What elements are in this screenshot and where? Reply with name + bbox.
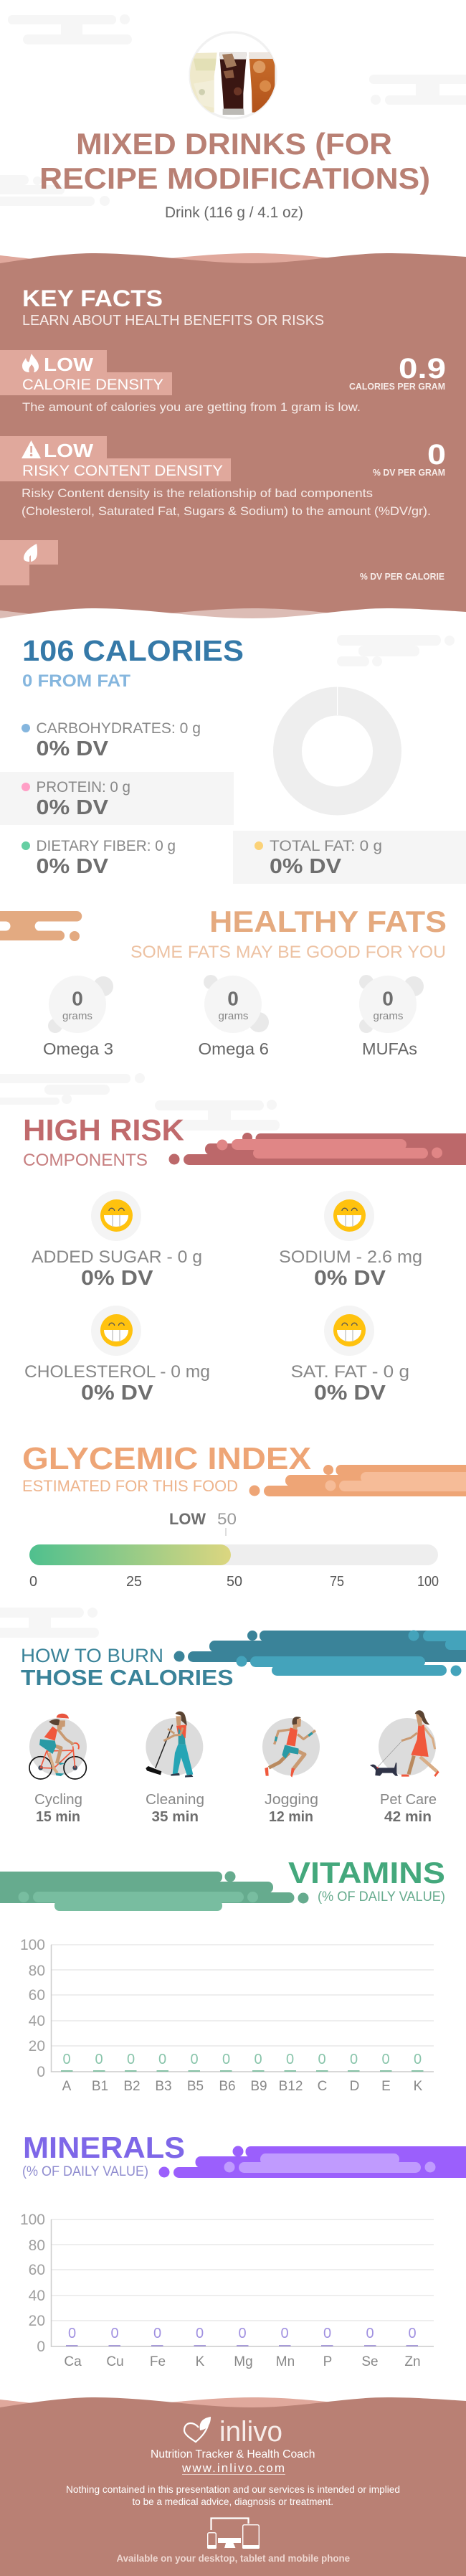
heading: glycemic index: GLYCEMIC INDEX bbox=[22, 1441, 311, 1476]
title bbox=[39, 127, 430, 195]
heading: how to burn those calories bbox=[21, 1645, 234, 1690]
legend: protein: PROTEIN: 0 g bbox=[36, 779, 130, 796]
glycemic index gauge: 25 bbox=[126, 1574, 142, 1590]
risky content density block bbox=[0, 436, 431, 518]
stat: percent DV per gram: % DV PER GRAM bbox=[373, 467, 445, 478]
calorie density block: The amount of calories you are getting from 1 gram is low. bbox=[22, 400, 361, 414]
calorie density block: CALORIE DENSITY bbox=[22, 376, 163, 393]
bar chart: minerals: Ca bbox=[64, 2354, 82, 2369]
stat: calories per gram: CALORIES PER GRAM bbox=[349, 381, 445, 392]
calorie density block: LOW bbox=[44, 354, 94, 375]
risk item: added sugar bbox=[32, 1191, 202, 1290]
glycemic index gauge: 75 bbox=[330, 1574, 344, 1590]
stat: MUFAs: grams bbox=[373, 1010, 403, 1022]
legend: carbohydrates bbox=[22, 720, 201, 760]
bar chart: vitamins: 100 bbox=[20, 1937, 45, 1953]
heading: minerals bbox=[22, 2131, 185, 2179]
bar chart: minerals: P bbox=[323, 2354, 332, 2369]
bar chart: minerals: 0 bbox=[408, 2326, 417, 2341]
bar chart: vitamins: 0 bbox=[286, 2052, 294, 2067]
heading: healthy fats: HEALTHY FATS bbox=[209, 905, 447, 938]
bar chart: minerals: 0 bbox=[280, 2326, 289, 2341]
activity: cycling bbox=[29, 1714, 87, 1825]
heading: vitamins: VITAMINS bbox=[288, 1856, 445, 1889]
bar chart: minerals: 60 bbox=[29, 2262, 45, 2278]
heading: high risk: COMPONENTS bbox=[23, 1151, 148, 1170]
stat: percent DV per gram bbox=[373, 439, 446, 478]
bar chart: vitamins: 0 bbox=[37, 2064, 45, 2080]
bar chart: minerals: Mg bbox=[234, 2354, 253, 2369]
subtitle: serving size: Drink (116 g / 4.1 oz) bbox=[165, 204, 303, 221]
heading: how to burn those calories: THOSE CALORIES bbox=[21, 1665, 234, 1690]
legend: dietary fiber bbox=[22, 838, 176, 878]
section banner: healthy fats bbox=[0, 911, 82, 941]
bar chart: vitamins: 60 bbox=[29, 1987, 45, 2004]
bar chart: vitamins: 0 bbox=[127, 2052, 135, 2067]
icon: cyclist bbox=[29, 1714, 87, 1779]
nutrient density block bbox=[0, 540, 58, 585]
stat: omega 3: 0 bbox=[72, 987, 83, 1010]
stat: omega 6: grams bbox=[218, 1010, 248, 1022]
disclaimer: to be a medical advice, diagnosis or treatment. bbox=[132, 2496, 333, 2507]
panel: footer bbox=[0, 2397, 466, 2576]
section banner: vitamins bbox=[0, 1871, 308, 1911]
title: RECIPE MODIFICATIONS) bbox=[39, 161, 430, 195]
bar chart: minerals: 100 bbox=[20, 2212, 45, 2228]
bar chart: vitamins: 0 bbox=[254, 2052, 262, 2067]
heading: healthy fats bbox=[130, 905, 447, 962]
risk item: added sugar: 0% DV bbox=[81, 1267, 153, 1290]
activity: cleaning: Cleaning bbox=[146, 1792, 204, 1808]
activity: cleaning: 35 min bbox=[152, 1809, 199, 1825]
legend: protein: 0% DV bbox=[36, 796, 108, 819]
stat: omega 6: Omega 6 bbox=[198, 1039, 269, 1058]
risk item: sodium: SODIUM - 2.6 mg bbox=[279, 1247, 422, 1267]
bar chart: vitamins: B9 bbox=[250, 2079, 267, 2094]
activity: jogging: 12 min bbox=[269, 1809, 313, 1825]
bar chart: minerals: Zn bbox=[404, 2354, 421, 2369]
bar chart: vitamins: 0 bbox=[222, 2052, 230, 2067]
bar chart: minerals: Se bbox=[361, 2354, 379, 2369]
key facts heading: LEARN ABOUT HEALTH BENEFITS OR RISKS bbox=[22, 313, 324, 329]
donut chart bbox=[287, 687, 387, 801]
heading: vitamins bbox=[288, 1856, 445, 1905]
title: MIXED DRINKS (FOR bbox=[76, 127, 392, 161]
bar chart: vitamins: 0 bbox=[158, 2052, 166, 2067]
bar chart: vitamins: B12 bbox=[279, 2079, 303, 2094]
bar chart: minerals: 0 bbox=[37, 2339, 45, 2355]
legend: dietary fiber: 0% DV bbox=[36, 855, 108, 878]
bar chart: vitamins: 80 bbox=[29, 1963, 45, 1979]
bar chart: minerals: 0 bbox=[153, 2326, 161, 2341]
calorie density block bbox=[0, 350, 361, 414]
stat: percent DV per calorie: % DV PER CALORIE bbox=[360, 571, 444, 582]
disclaimer: Nothing contained in this presentation and our services is intended or implied bbox=[66, 2484, 400, 2495]
bar chart: vitamins: D bbox=[350, 2079, 359, 2094]
activity: cleaning bbox=[146, 1712, 204, 1825]
bar chart: minerals: 0 bbox=[238, 2326, 247, 2341]
bar chart: vitamins: E bbox=[381, 2079, 391, 2094]
heading: high risk: HIGH RISK bbox=[23, 1113, 184, 1146]
heading: glycemic index: ESTIMATED FOR THIS FOOD bbox=[22, 1477, 238, 1495]
risky content density block: LOW bbox=[44, 440, 94, 461]
section banner: glycemic index bbox=[249, 1465, 466, 1496]
bar chart: vitamins: 0 bbox=[350, 2052, 358, 2067]
icon: person walking dog bbox=[370, 1710, 439, 1777]
stat: MUFAs: MUFAs bbox=[362, 1039, 417, 1058]
bar chart: minerals: Fe bbox=[150, 2354, 166, 2369]
icon: devices bbox=[207, 2518, 260, 2549]
heading: vitamins: (% OF DAILY VALUE) bbox=[318, 1889, 445, 1905]
key facts heading bbox=[22, 286, 324, 329]
bar chart: vitamins: 20 bbox=[29, 2038, 45, 2054]
bar chart: vitamins: A bbox=[62, 2079, 72, 2094]
risk item: saturated fat: 0% DV bbox=[314, 1382, 386, 1405]
glycemic index gauge bbox=[29, 1544, 439, 1590]
bar chart: minerals: 20 bbox=[29, 2313, 45, 2329]
bar chart: vitamins: B1 bbox=[92, 2079, 108, 2094]
bar chart: minerals: 0 bbox=[323, 2326, 331, 2341]
stat: percent DV per gram: 0 bbox=[427, 439, 446, 471]
legend: total fat: 0% DV bbox=[270, 855, 341, 878]
risky content density block: (Cholesterol, Saturated Fat, Sugars & Sodium) to the amount (%DV/gr). bbox=[22, 504, 431, 518]
icon: person sweeping bbox=[146, 1712, 203, 1778]
section banner: burn calories bbox=[173, 1630, 466, 1676]
bar chart: minerals: 0 bbox=[110, 2326, 119, 2341]
bar chart: minerals: 0 bbox=[366, 2326, 374, 2341]
heading: how to burn those calories: HOW TO BURN bbox=[21, 1645, 163, 1666]
bar chart: vitamins: 0 bbox=[318, 2052, 326, 2067]
bar chart: vitamins: 0 bbox=[62, 2052, 71, 2067]
glycemic index gauge: 100 bbox=[417, 1574, 439, 1590]
section banner: high risk bbox=[169, 1133, 466, 1165]
icon: warning triangle bbox=[22, 440, 41, 458]
icon: mixed drinks photo bbox=[186, 32, 276, 118]
bar chart: minerals: 0 bbox=[196, 2326, 204, 2341]
icon: runner bbox=[262, 1717, 320, 1778]
bar chart: vitamins: 0 bbox=[414, 2052, 422, 2067]
website link: www.inlivo.com bbox=[181, 2461, 285, 2475]
icon: leaf bbox=[24, 544, 37, 562]
activity: pet care: 42 min bbox=[384, 1809, 432, 1825]
stat: omega 3: Omega 3 bbox=[43, 1039, 113, 1058]
stat: omega 3 bbox=[43, 976, 113, 1058]
heading: calories bbox=[22, 634, 244, 691]
icon: inlivo heart logo bbox=[184, 2417, 211, 2442]
bar chart: vitamins: 0 bbox=[95, 2052, 103, 2067]
activity: pet care: Pet Care bbox=[380, 1792, 437, 1808]
risk item: cholesterol bbox=[24, 1306, 210, 1405]
icon: grinning face bbox=[333, 1314, 366, 1346]
activity: pet care bbox=[370, 1710, 439, 1825]
bar chart: minerals bbox=[20, 2212, 434, 2369]
icon: flame bbox=[22, 354, 39, 372]
icon: grinning face bbox=[100, 1314, 133, 1346]
bar chart: minerals: 40 bbox=[29, 2288, 45, 2304]
bar chart: vitamins: B6 bbox=[219, 2079, 236, 2094]
legend: dietary fiber: DIETARY FIBER: 0 g bbox=[36, 838, 176, 854]
disclaimer bbox=[66, 2484, 400, 2507]
availability note: Available on your desktop, tablet and mobile phone bbox=[116, 2553, 350, 2564]
risk item: sodium: 0% DV bbox=[314, 1267, 386, 1290]
stat: omega 6 bbox=[198, 975, 269, 1058]
legend: total fat bbox=[233, 831, 466, 884]
bar chart: vitamins: 0 bbox=[381, 2052, 390, 2067]
activity: jogging: Jogging bbox=[265, 1792, 318, 1808]
heading: minerals: (% OF DAILY VALUE) bbox=[22, 2164, 148, 2179]
icon: grinning face bbox=[100, 1199, 133, 1232]
heading: calories: 0 FROM FAT bbox=[22, 671, 130, 691]
heading: calories: 106 CALORIES bbox=[22, 634, 244, 667]
section banner: minerals bbox=[159, 2146, 466, 2178]
legend: carbohydrates: 0% DV bbox=[36, 737, 108, 760]
tagline: Nutrition Tracker & Health Coach bbox=[151, 2448, 315, 2461]
bar chart: vitamins bbox=[20, 1937, 434, 2094]
legend: total fat: TOTAL FAT: 0 g bbox=[270, 838, 382, 854]
activity: cycling: 15 min bbox=[36, 1809, 80, 1825]
bar chart: vitamins: K bbox=[414, 2079, 423, 2094]
activity: jogging bbox=[262, 1717, 320, 1825]
legend: carbohydrates: CARBOHYDRATES: 0 g bbox=[36, 720, 201, 737]
risky content density block: RISKY CONTENT DENSITY bbox=[22, 462, 223, 479]
bar chart: vitamins: 40 bbox=[29, 2013, 45, 2029]
risk item: saturated fat: SAT. FAT - 0 g bbox=[291, 1362, 409, 1382]
bar chart: vitamins: C bbox=[318, 2079, 327, 2094]
bar chart: vitamins: B3 bbox=[155, 2079, 172, 2094]
risk item: cholesterol: CHOLESTEROL - 0 mg bbox=[24, 1362, 210, 1382]
key facts heading: KEY FACTS bbox=[22, 286, 163, 311]
bar chart: vitamins: B2 bbox=[123, 2079, 141, 2094]
risk item: sodium bbox=[279, 1191, 422, 1290]
stat: MUFAs: 0 bbox=[382, 987, 394, 1010]
risk item: saturated fat bbox=[291, 1306, 409, 1405]
stat: omega 6: 0 bbox=[227, 987, 239, 1010]
risk item: added sugar: ADDED SUGAR - 0 g bbox=[32, 1247, 202, 1267]
icon: grinning face bbox=[333, 1199, 366, 1232]
bar chart: minerals: 80 bbox=[29, 2237, 45, 2254]
bar chart: minerals: K bbox=[196, 2354, 205, 2369]
bar chart: vitamins: 0 bbox=[190, 2052, 199, 2067]
heading: minerals: MINERALS bbox=[23, 2131, 185, 2164]
heading: healthy fats: SOME FATS MAY BE GOOD FOR YOU bbox=[130, 943, 446, 962]
glycemic value label bbox=[169, 1510, 237, 1536]
bar chart: minerals: 0 bbox=[68, 2326, 76, 2341]
stat: calories per gram: 0.9 bbox=[399, 353, 446, 384]
heading: glycemic index bbox=[22, 1441, 311, 1495]
stat: omega 3: grams bbox=[62, 1010, 92, 1022]
bar chart: minerals: Mn bbox=[276, 2354, 295, 2369]
panel: key facts bbox=[0, 253, 466, 635]
activity: cycling: Cycling bbox=[34, 1792, 82, 1808]
legend: protein bbox=[0, 772, 234, 825]
glycemic value label: LOW bbox=[169, 1510, 206, 1528]
risky content density block: Risky Content density is the relationship of bad components bbox=[22, 486, 373, 500]
bar chart: minerals: Cu bbox=[106, 2354, 124, 2369]
bar chart: vitamins: B5 bbox=[187, 2079, 204, 2094]
stat: MUFAs bbox=[359, 975, 424, 1058]
risk item: cholesterol: 0% DV bbox=[81, 1382, 153, 1405]
glycemic value label: 50 bbox=[217, 1510, 237, 1528]
glycemic index gauge: 0 bbox=[29, 1574, 37, 1590]
glycemic index gauge: 50 bbox=[227, 1574, 242, 1590]
heading: high risk bbox=[23, 1113, 184, 1170]
logo wordmark: inlivo bbox=[219, 2416, 282, 2448]
stat: calories per gram bbox=[349, 353, 446, 392]
